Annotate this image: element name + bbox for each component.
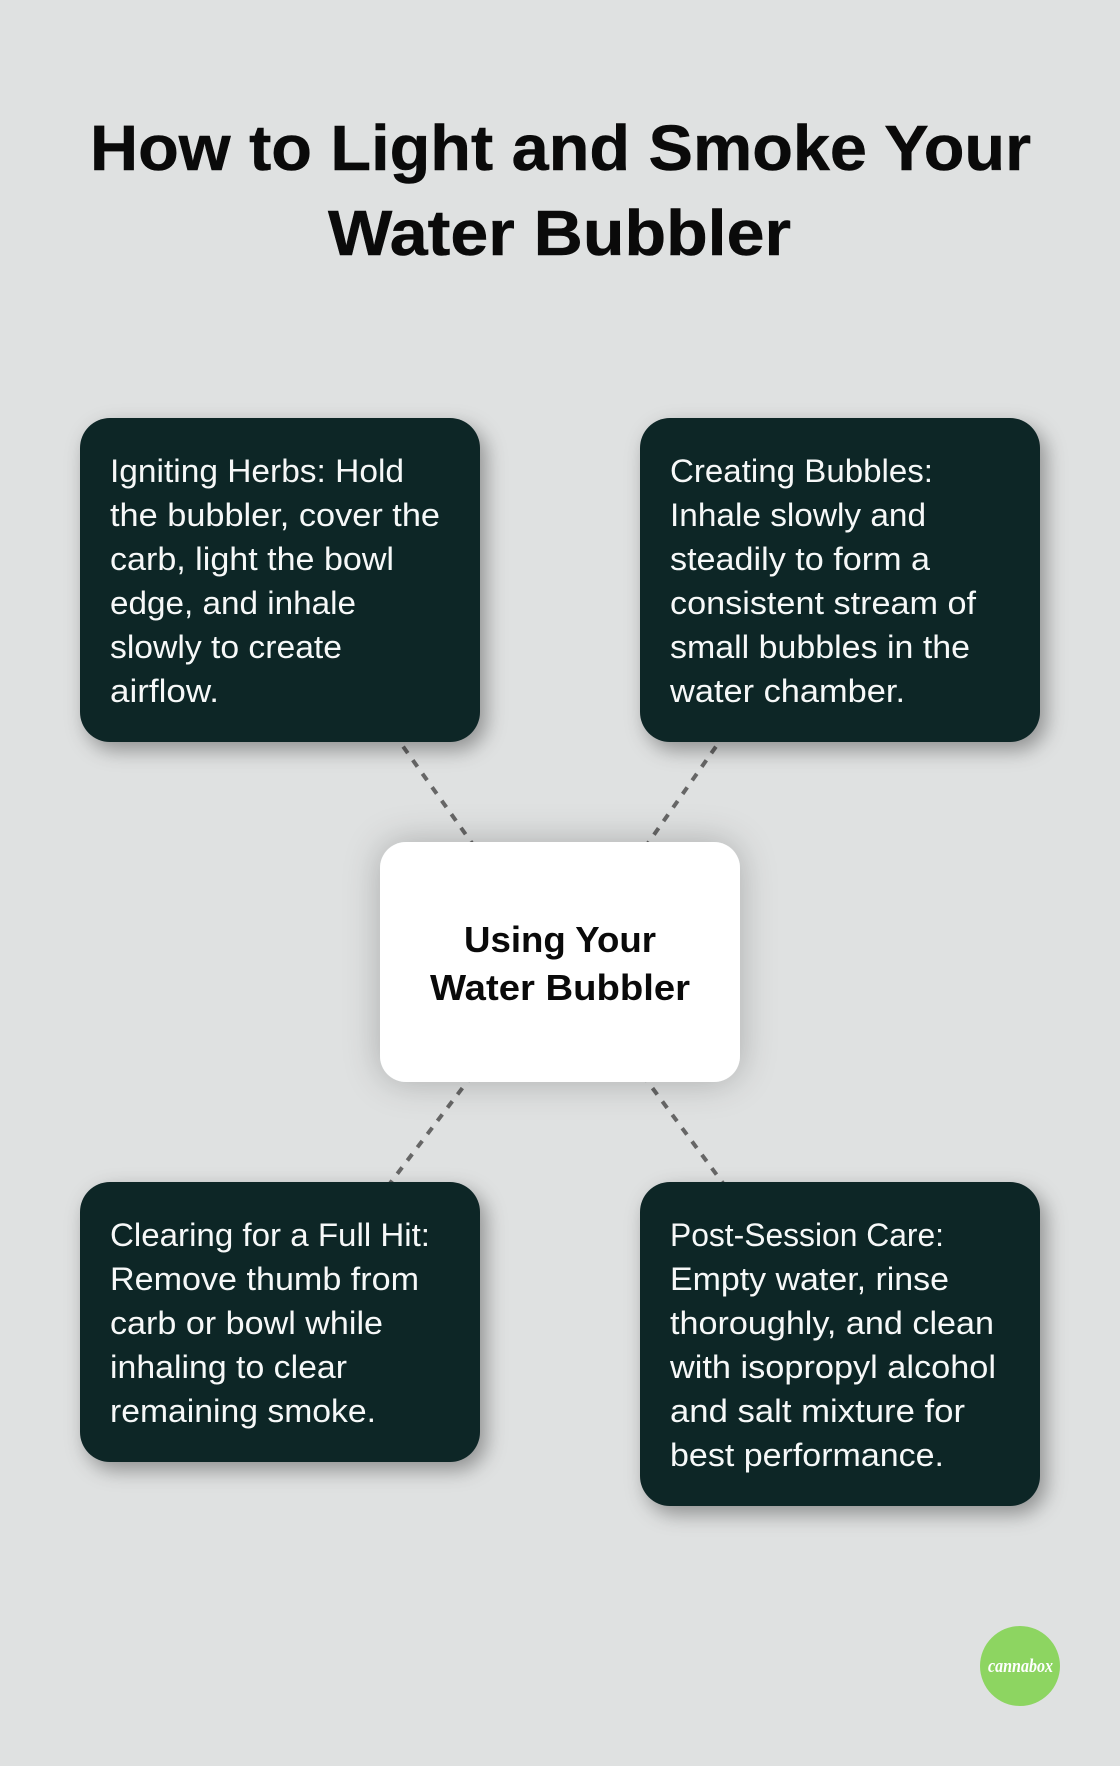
text: creating bubbles: water chamber. — [669, 673, 905, 709]
text: post-session care: thoroughly, and clean — [670, 1305, 994, 1341]
text: igniting herbs: carb, light the bowl — [110, 541, 394, 577]
logo: cannabox badge: cannabox — [988, 1656, 1053, 1677]
text: creating bubbles: Creating Bubbles: — [670, 453, 933, 489]
text: igniting herbs: the bubbler, cover the — [110, 497, 440, 533]
text: igniting herbs: Igniting Herbs: Hold — [110, 453, 404, 489]
text: creating bubbles: small bubbles in the — [670, 629, 970, 665]
text: using your water bubbler: Water Bubbler — [430, 967, 690, 1008]
text: igniting herbs: airflow. — [110, 673, 219, 709]
panel: clearing for a full hit — [80, 1182, 480, 1462]
panel: igniting herbs — [80, 418, 480, 742]
text: creating bubbles — [669, 453, 976, 709]
text: igniting herbs: edge, and inhale — [110, 585, 356, 621]
text: post-session care: Post-Session Care: — [670, 1217, 944, 1253]
text: post-session care: Empty water, rinse — [670, 1261, 949, 1297]
text: post-session care: with isopropyl alcohol — [669, 1349, 996, 1385]
text: post-session care: and salt mixture for — [670, 1393, 965, 1429]
text: using your water bubbler — [430, 919, 690, 1008]
connector lines — [388, 738, 725, 1186]
panel: post-session care — [640, 1182, 1040, 1506]
text: creating bubbles: consistent stream of — [670, 585, 976, 621]
text: igniting herbs: slowly to create — [110, 629, 342, 665]
text: post-session care — [669, 1217, 996, 1473]
text: clearing: remaining smoke. — [110, 1393, 376, 1429]
text: igniting herbs — [110, 453, 440, 709]
text: clearing — [110, 1217, 430, 1429]
text: clearing: Remove thumb from — [110, 1261, 419, 1297]
title: Water Bubbler — [328, 197, 791, 269]
panel: creating bubbles — [640, 418, 1040, 742]
panel: center topic — [380, 842, 740, 1082]
title: How to Light and Smoke Your — [90, 112, 1031, 184]
text: creating bubbles: Inhale slowly and — [670, 497, 926, 533]
title — [90, 112, 1031, 269]
text: clearing: inhaling to clear — [110, 1349, 347, 1385]
text: post-session care: best performance. — [670, 1437, 944, 1473]
text: clearing: carb or bowl while — [110, 1305, 383, 1341]
text: clearing: Clearing for a Full Hit: — [110, 1217, 430, 1253]
text: using your water bubbler: Using Your — [464, 919, 656, 960]
logo: cannabox badge — [980, 1626, 1060, 1706]
text: creating bubbles: steadily to form a — [670, 541, 930, 577]
